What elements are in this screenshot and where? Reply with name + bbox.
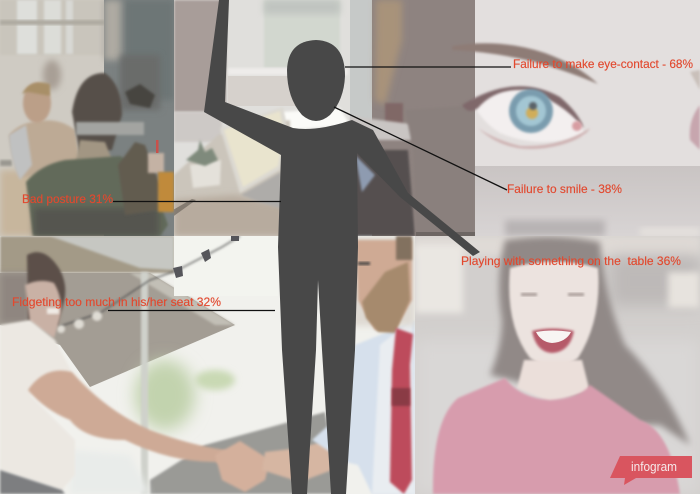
man's tie — [390, 328, 413, 494]
second eye — [690, 105, 700, 150]
vase and plant — [125, 84, 155, 108]
plant pot — [190, 160, 221, 188]
man's forearm — [264, 442, 330, 480]
laptop — [220, 107, 288, 193]
face — [509, 262, 599, 367]
woman's hair and face — [27, 252, 65, 325]
darker right portion — [350, 0, 374, 236]
connector lines — [108, 67, 511, 310]
label: eye contact: Failure to make eye-contact - 68% — [513, 57, 693, 71]
label: bad posture: Bad posture 31% — [22, 192, 113, 206]
woman's white shirt — [0, 320, 75, 490]
label: fidgeting: Fidgeting too much in his/her seat 32% — [12, 295, 221, 309]
panel: smiling woman photo — [415, 236, 700, 494]
hair — [490, 236, 690, 445]
woman's arm — [27, 369, 224, 464]
table — [174, 120, 290, 236]
man in cafe — [9, 120, 80, 178]
icon: human silhouette — [204, 0, 480, 494]
woman from behind — [72, 73, 122, 155]
eyebrow — [452, 43, 598, 84]
string of lights — [58, 236, 240, 327]
white collar highlight — [282, 108, 350, 130]
neck — [517, 360, 590, 402]
awning top — [0, 236, 174, 273]
infogram badge — [610, 456, 692, 485]
label: smile: Failure to smile - 38% — [507, 182, 622, 196]
label: playing with something: Playing with something on the table 36% — [461, 254, 681, 268]
silhouette head — [287, 40, 345, 121]
awning fogged underside — [0, 273, 235, 387]
pole — [141, 272, 148, 494]
panel: handshake photo — [0, 236, 415, 494]
silhouette body — [204, 0, 480, 494]
man's shirt — [312, 320, 415, 494]
panel: office desk photo — [174, 0, 475, 236]
lower background — [150, 412, 340, 494]
red sweater — [433, 378, 680, 494]
panel: eye close-up photo — [454, 40, 700, 236]
lower band — [475, 166, 700, 236]
smile — [532, 328, 574, 353]
foliage — [135, 360, 195, 430]
man's head and beard — [356, 240, 412, 330]
infogram badge: infogram — [631, 460, 677, 474]
clasped hands — [215, 441, 270, 492]
background figure — [43, 60, 61, 90]
panel: cafe conversation photo — [0, 0, 174, 236]
eye — [472, 89, 585, 142]
